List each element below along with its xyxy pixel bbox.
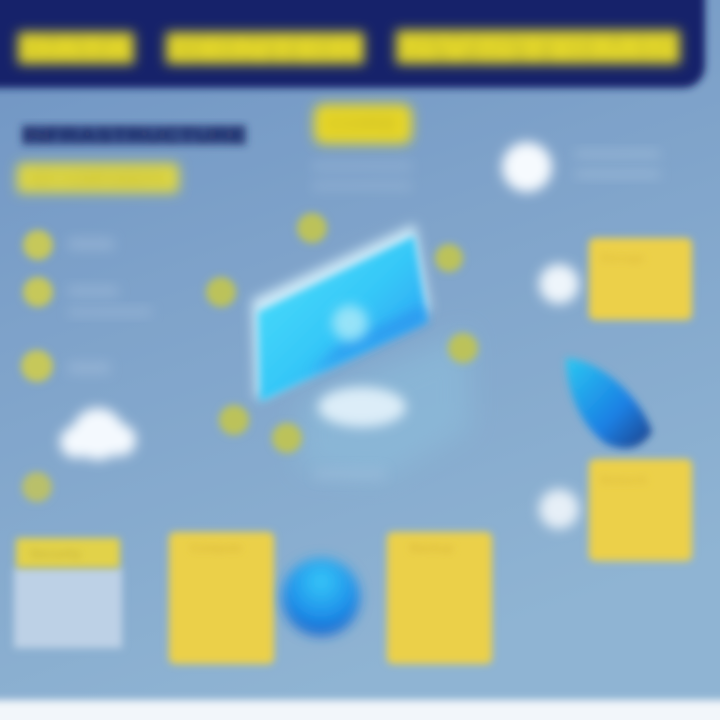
- right yellow card 2: [589, 459, 692, 561]
- left heading: INFRASTRUCTURE: [22, 125, 246, 147]
- top centre badge: [314, 104, 412, 144]
- left bullet list: [21, 230, 152, 502]
- title: SYSTEMS: [396, 29, 680, 70]
- bottom yellow card 2: [387, 532, 492, 664]
- title: DATA: [18, 29, 134, 70]
- right yellow card 2: Network: [600, 473, 648, 487]
- right node 1: [539, 264, 579, 304]
- right yellow card 1: Storage: [600, 251, 645, 265]
- title banner: [0, 0, 705, 88]
- blue drop icon: [566, 358, 652, 448]
- right node 2: [539, 489, 579, 529]
- title: [18, 29, 680, 70]
- badge caption: [312, 162, 412, 190]
- footer strip: [0, 700, 720, 720]
- bottom yellow card 1: [169, 532, 274, 664]
- cloud icon left: [60, 408, 136, 460]
- right yellow card 1: [589, 238, 692, 320]
- bullet 1: [23, 230, 114, 260]
- title: CENTER: [166, 29, 364, 70]
- bullet 4: [22, 472, 52, 502]
- glow under screen: [300, 330, 470, 480]
- globe icon: [282, 558, 360, 636]
- bottom left panel: Security: [30, 546, 82, 561]
- bullet 2: [23, 277, 152, 316]
- sun icon and caption: [502, 142, 660, 192]
- bottom left panel: [14, 538, 122, 648]
- central isometric screen: [252, 224, 430, 402]
- orbit nodes: [206, 213, 478, 453]
- left yellow label: KEY COMPONENTS: [30, 171, 166, 188]
- left yellow label: [17, 163, 179, 193]
- central cloud: [315, 387, 406, 478]
- bottom yellow card 2: Backup: [410, 541, 453, 555]
- top centre badge: CORE: [328, 114, 398, 134]
- bottom yellow card 1: Compute: [190, 541, 242, 555]
- bullet 3: [21, 350, 110, 382]
